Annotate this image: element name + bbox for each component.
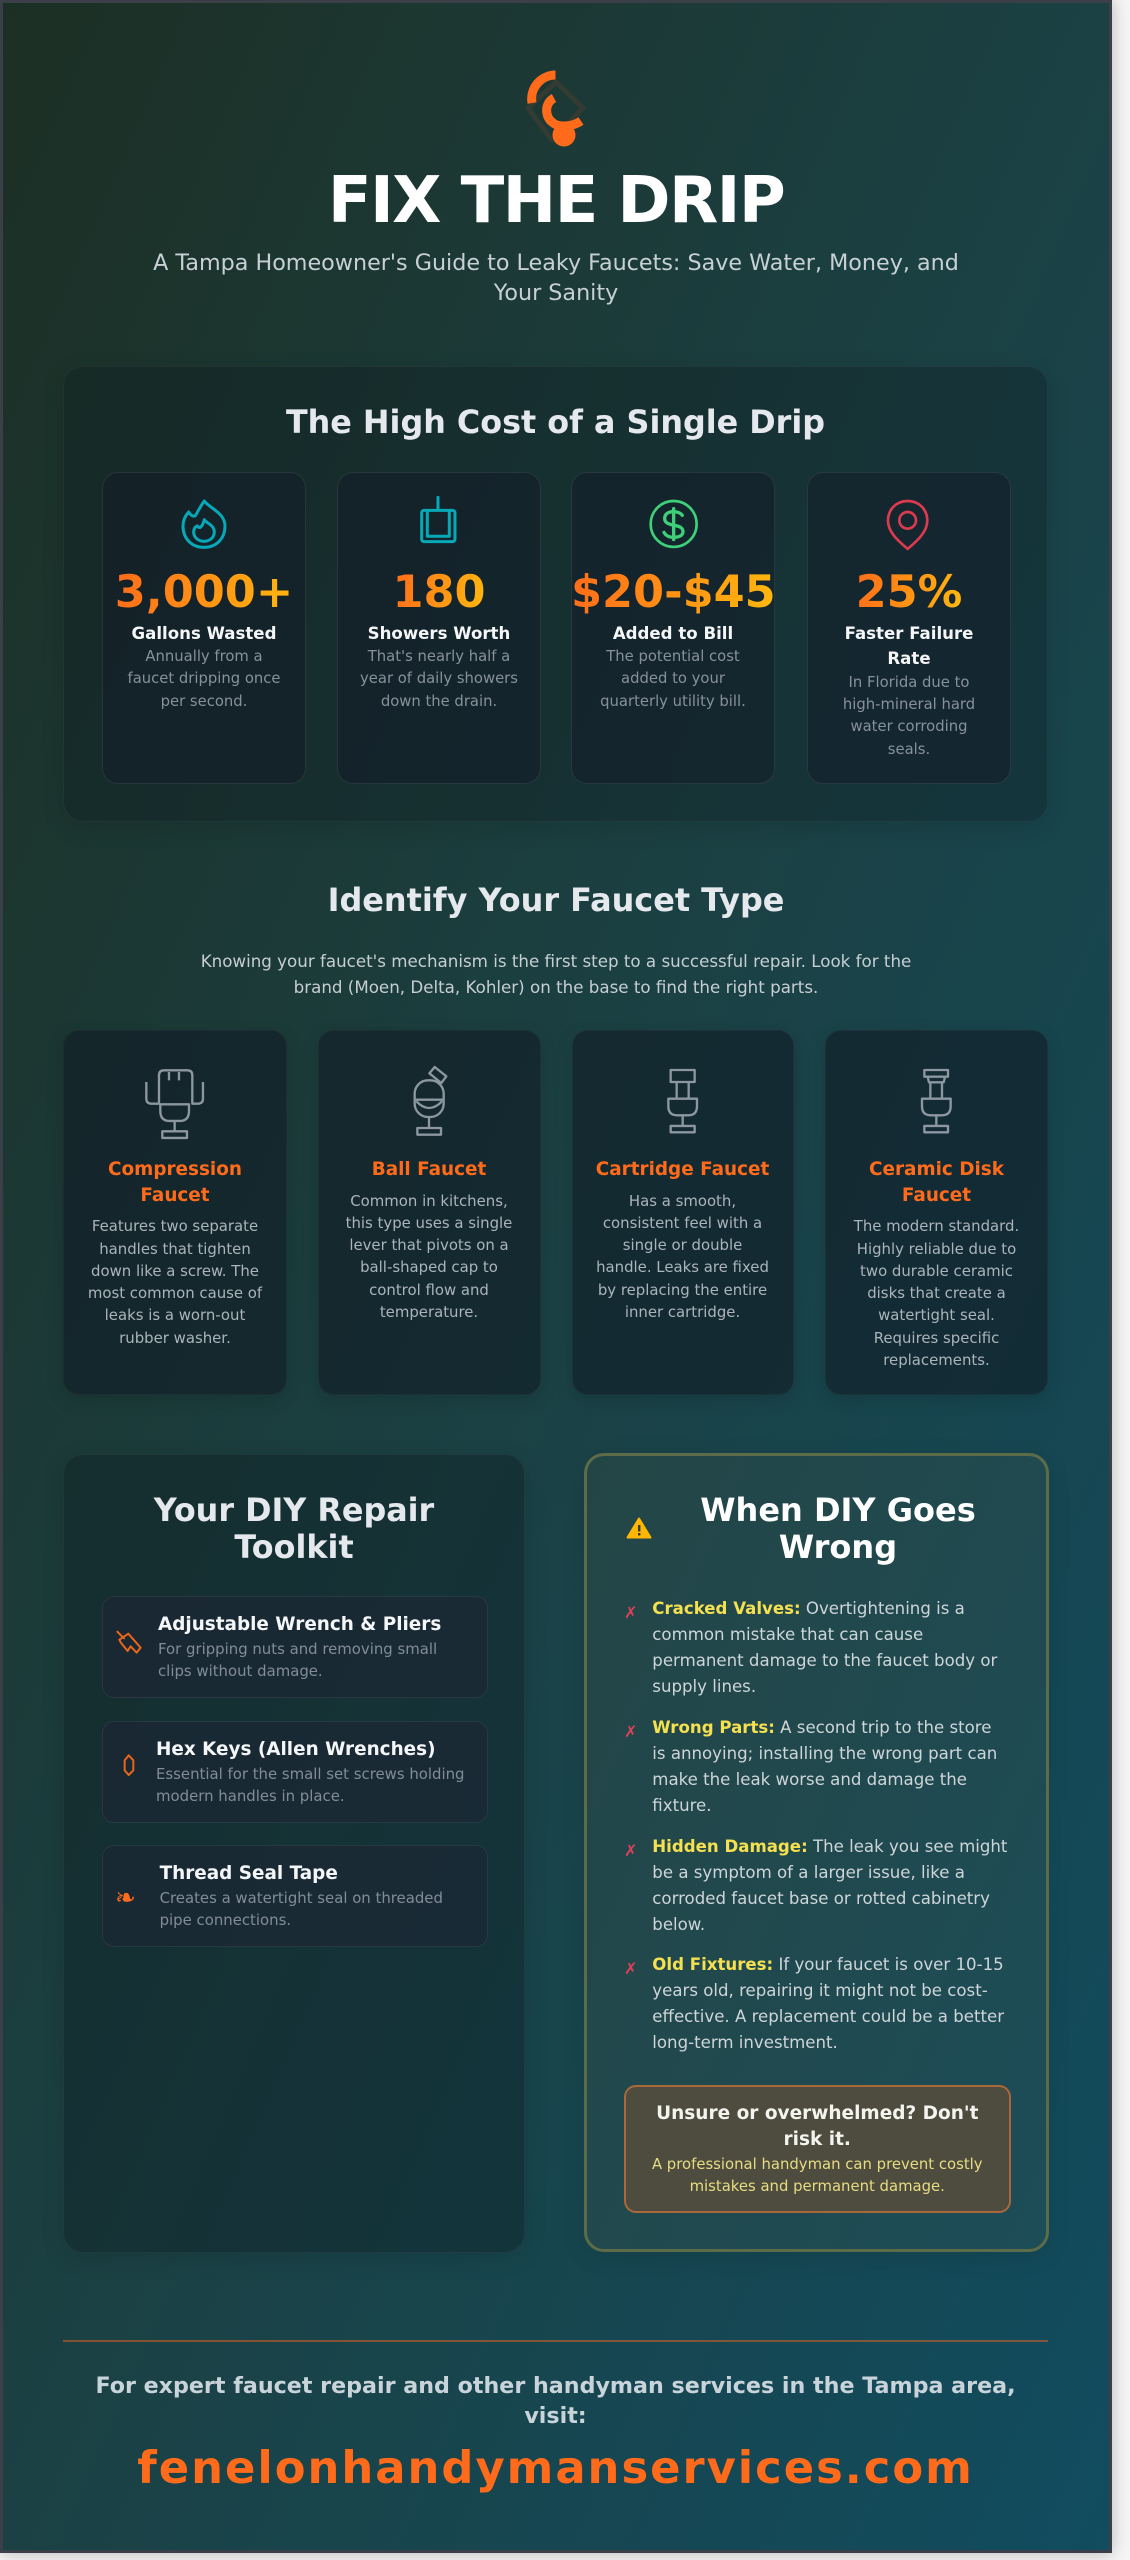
heading: Your DIY Repair	[154, 1492, 434, 1529]
cross mark: ✗	[624, 1841, 637, 1860]
tool description: pipe connections.	[160, 1911, 291, 1929]
stat description: down the drain.	[381, 693, 497, 710]
footer text: visit:	[524, 2403, 587, 2429]
heading: When DIY Goes	[700, 1491, 976, 1529]
faucet description: lever that pivots on a	[349, 1236, 509, 1254]
stat number: 25%	[856, 566, 962, 618]
faucet description: Highly reliable due to	[857, 1240, 1016, 1258]
stat number: 180	[392, 566, 486, 618]
icon: shower	[420, 496, 456, 544]
risk text: effective. A replacement could be a better	[652, 2007, 1004, 2026]
faucet description: control flow and	[369, 1281, 489, 1299]
faucet description: handles that tighten	[99, 1240, 251, 1258]
stat label: Showers Worth	[368, 624, 510, 642]
tool description: modern handles in place.	[156, 1787, 345, 1805]
faucet description: by replacing the entire	[598, 1281, 767, 1299]
callout heading: risk it.	[784, 2129, 851, 2150]
subtitle: A Tampa Homeowner's Guide to Leaky Faucets: Save Water, Money, and	[153, 250, 959, 276]
faucet name: Faucet	[902, 1185, 971, 1206]
risk text	[652, 1952, 1004, 2056]
risk text: Wrong Parts: A second trip to the store	[652, 1718, 991, 1737]
tool name: Thread Seal Tape	[160, 1863, 338, 1884]
faucet description: ball-shaped cap to	[360, 1258, 498, 1276]
tool name: Adjustable Wrench & Pliers	[158, 1614, 441, 1635]
stat description: In Florida due to	[849, 674, 969, 691]
faucet description: inner cartridge.	[625, 1303, 740, 1321]
risk text	[652, 1718, 997, 1815]
faucet card: ball	[318, 1030, 540, 1395]
icon: compression faucet	[145, 1069, 204, 1140]
callout text	[624, 2153, 1011, 2198]
icon: ceramic disk faucet	[920, 1068, 952, 1134]
stat description: quarterly utility bill.	[600, 693, 746, 710]
icon: hex key	[124, 1754, 134, 1776]
risk text: below.	[652, 1915, 705, 1934]
stat number: $20-$45	[571, 566, 776, 618]
faucet description: Common in kitchens,	[350, 1192, 508, 1210]
risk text: Old Fixtures: If your faucet is over 10-15	[652, 1955, 1004, 1974]
stat label: Gallons Wasted	[132, 624, 276, 642]
risk text	[652, 1599, 998, 1696]
icon: ball faucet	[414, 1066, 448, 1136]
stat number: 3,000+	[115, 566, 293, 618]
faucet name: Ball Faucet	[372, 1159, 486, 1180]
tool description: Essential for the small set screws holding	[156, 1765, 464, 1783]
icon: warning triangle	[626, 1518, 652, 1538]
risk text	[652, 1834, 1007, 1938]
risk: wrong parts	[624, 1718, 997, 1815]
faucet description: this type uses a single	[346, 1214, 512, 1232]
risk: hidden damage	[584, 1834, 1049, 1938]
faucet description: most common cause of	[88, 1284, 262, 1302]
callout text: mistakes and permanent damage.	[690, 2177, 945, 2195]
risk text: is annoying; installing the wrong part can	[652, 1744, 997, 1763]
tool description	[160, 1889, 443, 1929]
faucet description: disks that create a	[867, 1284, 1006, 1302]
title: FIX THE DRIP	[328, 164, 784, 238]
tool: hex keys	[102, 1721, 488, 1823]
faucet name	[108, 1159, 242, 1206]
tool description: For gripping nuts and removing small	[158, 1640, 437, 1658]
risk text: make the leak worse and damage the	[652, 1770, 967, 1789]
risk text: fixture.	[652, 1796, 712, 1815]
faucet name	[869, 1159, 1004, 1206]
subtitle	[153, 250, 959, 306]
faucet name: Cartridge Faucet	[596, 1159, 769, 1180]
footer	[63, 2340, 1048, 2510]
faucet name: Ceramic Disk	[869, 1159, 1004, 1180]
faucet description: consistent feel with a	[603, 1214, 762, 1232]
section: identify your faucet type	[201, 880, 911, 997]
icon: map pin	[886, 500, 929, 550]
tool description: clips without damage.	[158, 1662, 323, 1680]
icon: cartridge faucet	[667, 1068, 698, 1134]
stat description: faucet dripping once	[127, 670, 281, 687]
risk text: years old, repairing it might not be cost-	[652, 1981, 988, 2000]
website url: fenelonhandymanservices.com	[137, 2440, 974, 2494]
faucet description: leaks is a worn-out	[105, 1306, 245, 1324]
heading: Identify Your Faucet Type	[328, 880, 784, 918]
faucet description	[854, 1217, 1019, 1369]
risk text: long-term investment.	[652, 2033, 838, 2052]
faucet description: The modern standard.	[854, 1217, 1019, 1235]
stat description: per second.	[161, 693, 247, 710]
stat description: The potential cost	[606, 648, 740, 665]
faucet description	[596, 1192, 769, 1321]
header	[153, 70, 959, 306]
icon: tape: ❧	[115, 1883, 136, 1912]
cross mark: ✗	[624, 1959, 637, 1978]
stat description: year of daily showers	[360, 670, 518, 687]
cross mark: ✗	[624, 1722, 637, 1741]
risk text: corroded faucet base or rotted cabinetry	[652, 1889, 990, 1908]
risk text: supply lines.	[652, 1677, 756, 1696]
risk: cracked valves	[624, 1599, 998, 1696]
risk: old fixtures	[584, 1952, 1049, 2056]
faucet card: compression	[63, 1030, 287, 1395]
tool description	[156, 1765, 464, 1805]
icon: wrench	[116, 1630, 142, 1654]
faucet description: Features two separate	[92, 1217, 258, 1235]
stat description	[843, 674, 975, 758]
heading: The High Cost of a Single Drip	[286, 404, 825, 441]
faucet description: single or double	[623, 1236, 742, 1254]
faucet description: down like a screw. The	[91, 1262, 259, 1280]
icon: flame	[182, 499, 226, 549]
subtitle: Your Sanity	[494, 280, 618, 306]
stat card: gallons wasted	[102, 472, 306, 784]
stat card: faster failure rate	[807, 472, 1011, 784]
stat description: water corroding	[851, 718, 967, 735]
faucet description	[88, 1217, 262, 1347]
stat description: high-mineral hard	[843, 696, 975, 713]
panel: the high cost of a single drip	[63, 366, 1048, 822]
callout text: A professional handyman can prevent costly	[652, 2155, 983, 2173]
heading: Toolkit	[234, 1529, 354, 1566]
faucet description: two durable ceramic	[860, 1262, 1013, 1280]
footer text	[63, 2371, 1048, 2431]
intro text: Knowing your faucet's mechanism is the first step to a successful repair. Look for the	[201, 951, 911, 971]
faucet card: ceramic disk	[825, 1030, 1048, 1395]
heading: Wrong	[779, 1528, 897, 1566]
faucet name: Compression	[108, 1159, 242, 1180]
stat description: added to your	[621, 670, 725, 687]
risk text: Hidden Damage: The leak you see might	[652, 1837, 1007, 1856]
faucet card: cartridge	[572, 1030, 794, 1395]
intro text	[201, 951, 911, 997]
icon: dripping faucet logo	[526, 70, 586, 146]
stat description: That's nearly half a	[368, 648, 510, 665]
panel: when DIY goes wrong	[584, 1453, 1049, 2252]
risk text: common mistake that can cause	[652, 1625, 923, 1644]
callout heading	[624, 2101, 1011, 2153]
icon: dollar	[649, 500, 698, 548]
faucet description: rubber washer.	[119, 1329, 231, 1347]
risk text: be a symptom of a larger issue, like a	[652, 1863, 965, 1882]
stat label: Added to Bill	[613, 624, 733, 642]
stat description	[600, 648, 746, 710]
footer text: For expert faucet repair and other handyman services in the Tampa area,	[95, 2373, 1016, 2399]
stat label: Faster Failure	[845, 624, 973, 642]
stat card: showers worth	[337, 472, 541, 784]
faucet description: watertight seal.	[878, 1306, 995, 1324]
faucet description: Has a smooth,	[629, 1192, 736, 1210]
faucet description: temperature.	[380, 1303, 478, 1321]
faucet description: handle. Leaks are fixed	[596, 1258, 769, 1276]
faucet description: replacements.	[883, 1351, 990, 1369]
risk text: Cracked Valves: Overtightening is a	[652, 1599, 965, 1618]
stat card: added to bill	[571, 472, 775, 784]
tool name: Hex Keys (Allen Wrenches)	[156, 1739, 436, 1760]
stat description	[360, 648, 518, 710]
faucet description: Requires specific	[874, 1329, 999, 1347]
faucet name: Faucet	[140, 1185, 210, 1206]
stat label	[845, 624, 973, 668]
callout: call a professional	[624, 2085, 1011, 2213]
stat description: Annually from a	[145, 648, 263, 665]
tool: adjustable wrench and pliers	[102, 1596, 488, 1698]
tool description: Creates a watertight seal on threaded	[160, 1889, 443, 1907]
callout heading: Unsure or overwhelmed? Don't	[656, 2103, 978, 2124]
heading	[154, 1492, 434, 1566]
faucet description	[346, 1192, 512, 1321]
tool description	[158, 1640, 437, 1680]
panel: DIY repair toolkit	[63, 1454, 525, 2253]
heading	[700, 1491, 976, 1566]
cross mark: ✗	[624, 1603, 637, 1622]
risk text: permanent damage to the faucet body or	[652, 1651, 997, 1670]
stat label: Rate	[887, 649, 931, 668]
stat description	[127, 648, 281, 710]
stat description: seals.	[888, 741, 930, 758]
intro text: brand (Moen, Delta, Kohler) on the base to find the right parts.	[294, 977, 818, 997]
tool: thread seal tape	[102, 1845, 488, 1947]
